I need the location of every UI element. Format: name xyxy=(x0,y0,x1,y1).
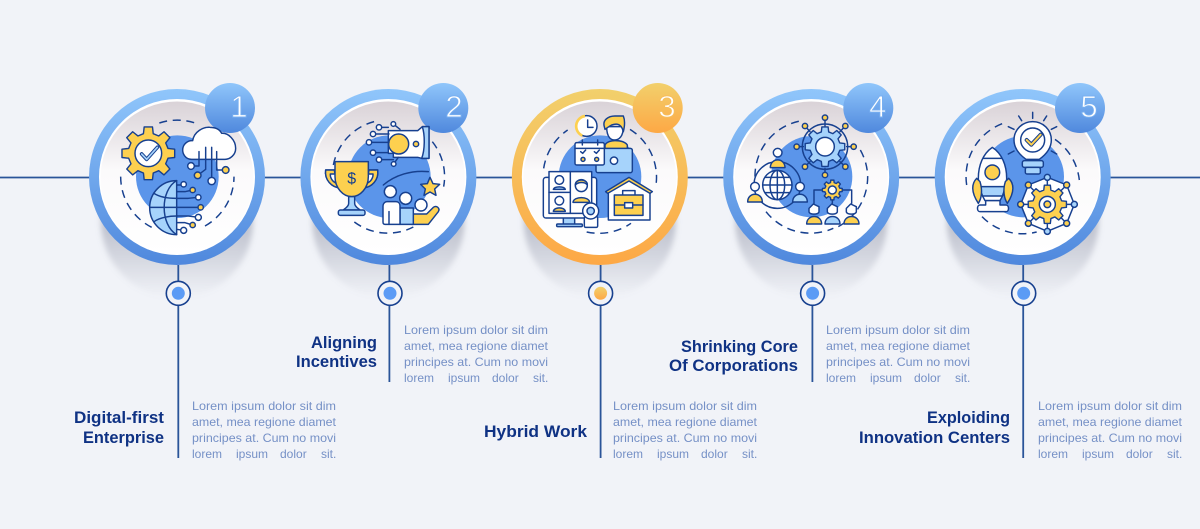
step 1: Digital-first Enterprise xyxy=(74,83,337,461)
body text 1: principes at. Cum no movi xyxy=(192,431,336,445)
number badge 3: 3 xyxy=(658,89,676,124)
body text 2: ipsum xyxy=(448,371,480,385)
title 4: Shrinking Core xyxy=(681,337,798,356)
step 2: Aligning Incentives xyxy=(296,83,549,385)
body text 3: principes at. Cum no movi xyxy=(613,431,757,445)
title 4: Of Corporations xyxy=(669,356,798,375)
icon: trophy, money and team: $ xyxy=(347,170,356,187)
body text 2: Lorem ipsum dolor sit dim xyxy=(404,323,548,337)
circle frame 4 xyxy=(723,89,899,298)
body text 4: amet, mea regione diamet xyxy=(826,339,971,353)
title 1 xyxy=(74,408,164,447)
title 5 xyxy=(859,408,1010,447)
circle frame 3 xyxy=(512,89,688,298)
title 4 xyxy=(669,337,798,375)
body text 4: Lorem ipsum dolor sit dim xyxy=(826,323,970,337)
title 2: Aligning xyxy=(311,333,377,352)
body text 2: amet, mea regione diamet xyxy=(404,339,549,353)
body text 4: sit. xyxy=(955,371,970,385)
body text 4: principes at. Cum no movi xyxy=(826,355,970,369)
title 5: Innovation Centers xyxy=(859,428,1010,447)
body text 1: Lorem ipsum dolor sit dim xyxy=(192,399,336,413)
step 4: Shrinking Core Of Corporations xyxy=(669,83,971,385)
body text 3 xyxy=(613,399,758,461)
number badge 2: 2 xyxy=(445,89,463,124)
body text 2: sit. xyxy=(533,371,548,385)
number badge 1 xyxy=(205,83,255,133)
icon: globe, gears and org chart xyxy=(748,115,868,233)
body text 3: dolor xyxy=(701,447,728,461)
icon: gear, cloud and globe xyxy=(121,120,236,235)
body text 2 xyxy=(404,323,549,385)
body text 3: ipsum xyxy=(657,447,689,461)
number badge 3 xyxy=(633,83,683,133)
number badge 2 xyxy=(418,83,468,133)
body text 5 xyxy=(1038,399,1183,461)
body text 5: ipsum xyxy=(1082,447,1114,461)
body text 3: amet, mea regione diamet xyxy=(613,415,758,429)
icon: remote work xyxy=(543,116,657,233)
number badge 4: 4 xyxy=(869,89,886,124)
body text 4: lorem xyxy=(826,371,856,385)
connector and node 1 xyxy=(166,265,190,458)
circle frame 5 xyxy=(935,89,1111,298)
title 2: Incentives xyxy=(296,352,377,371)
title 1: Digital-first xyxy=(74,408,164,427)
connector and node 3 xyxy=(589,265,613,458)
circle frame 2 xyxy=(300,89,476,298)
body text 1: dolor xyxy=(280,447,307,461)
body text 2: dolor xyxy=(492,371,519,385)
body text 1 xyxy=(192,399,337,461)
body text 1: sit. xyxy=(321,447,336,461)
step 3: Hybrid Work xyxy=(484,83,758,461)
body text 1: amet, mea regione diamet xyxy=(192,415,337,429)
body text 2: lorem xyxy=(404,371,434,385)
connector and node 4 xyxy=(801,265,825,382)
body text 5: amet, mea regione diamet xyxy=(1038,415,1183,429)
title 2 xyxy=(296,333,377,371)
title 3: Hybrid Work xyxy=(484,422,588,441)
body text 3: lorem xyxy=(613,447,643,461)
icon: rocket, light bulb and gear network xyxy=(966,112,1079,234)
number badge 5 xyxy=(1055,83,1105,133)
horizontal timeline xyxy=(0,176,1200,178)
body text 1: ipsum xyxy=(236,447,268,461)
body text 1: lorem xyxy=(192,447,222,461)
body text 2: principes at. Cum no movi xyxy=(404,355,548,369)
circle frame 1 xyxy=(89,89,265,298)
number badge 1: 1 xyxy=(230,89,248,124)
connector and node 5 xyxy=(1012,265,1036,458)
body text 4 xyxy=(826,323,971,385)
body text 5: Lorem ipsum dolor sit dim xyxy=(1038,399,1182,413)
number badge 5: 5 xyxy=(1080,89,1098,124)
body text 5: dolor xyxy=(1126,447,1153,461)
icon: trophy, money and team xyxy=(326,121,445,233)
body text 3: sit. xyxy=(742,447,757,461)
number badge 4 xyxy=(843,83,893,133)
body text 4: dolor xyxy=(914,371,941,385)
step 5: Exploiding Innovation Centers xyxy=(859,83,1183,461)
title 5: Exploiding xyxy=(927,408,1010,427)
body text 3: Lorem ipsum dolor sit dim xyxy=(613,399,757,413)
body text 5: principes at. Cum no movi xyxy=(1038,431,1182,445)
body text 4: ipsum xyxy=(870,371,902,385)
body text 5: lorem xyxy=(1038,447,1068,461)
title 1: Enterprise xyxy=(83,428,164,447)
body text 5: sit. xyxy=(1167,447,1182,461)
connector and node 2 xyxy=(378,265,402,382)
